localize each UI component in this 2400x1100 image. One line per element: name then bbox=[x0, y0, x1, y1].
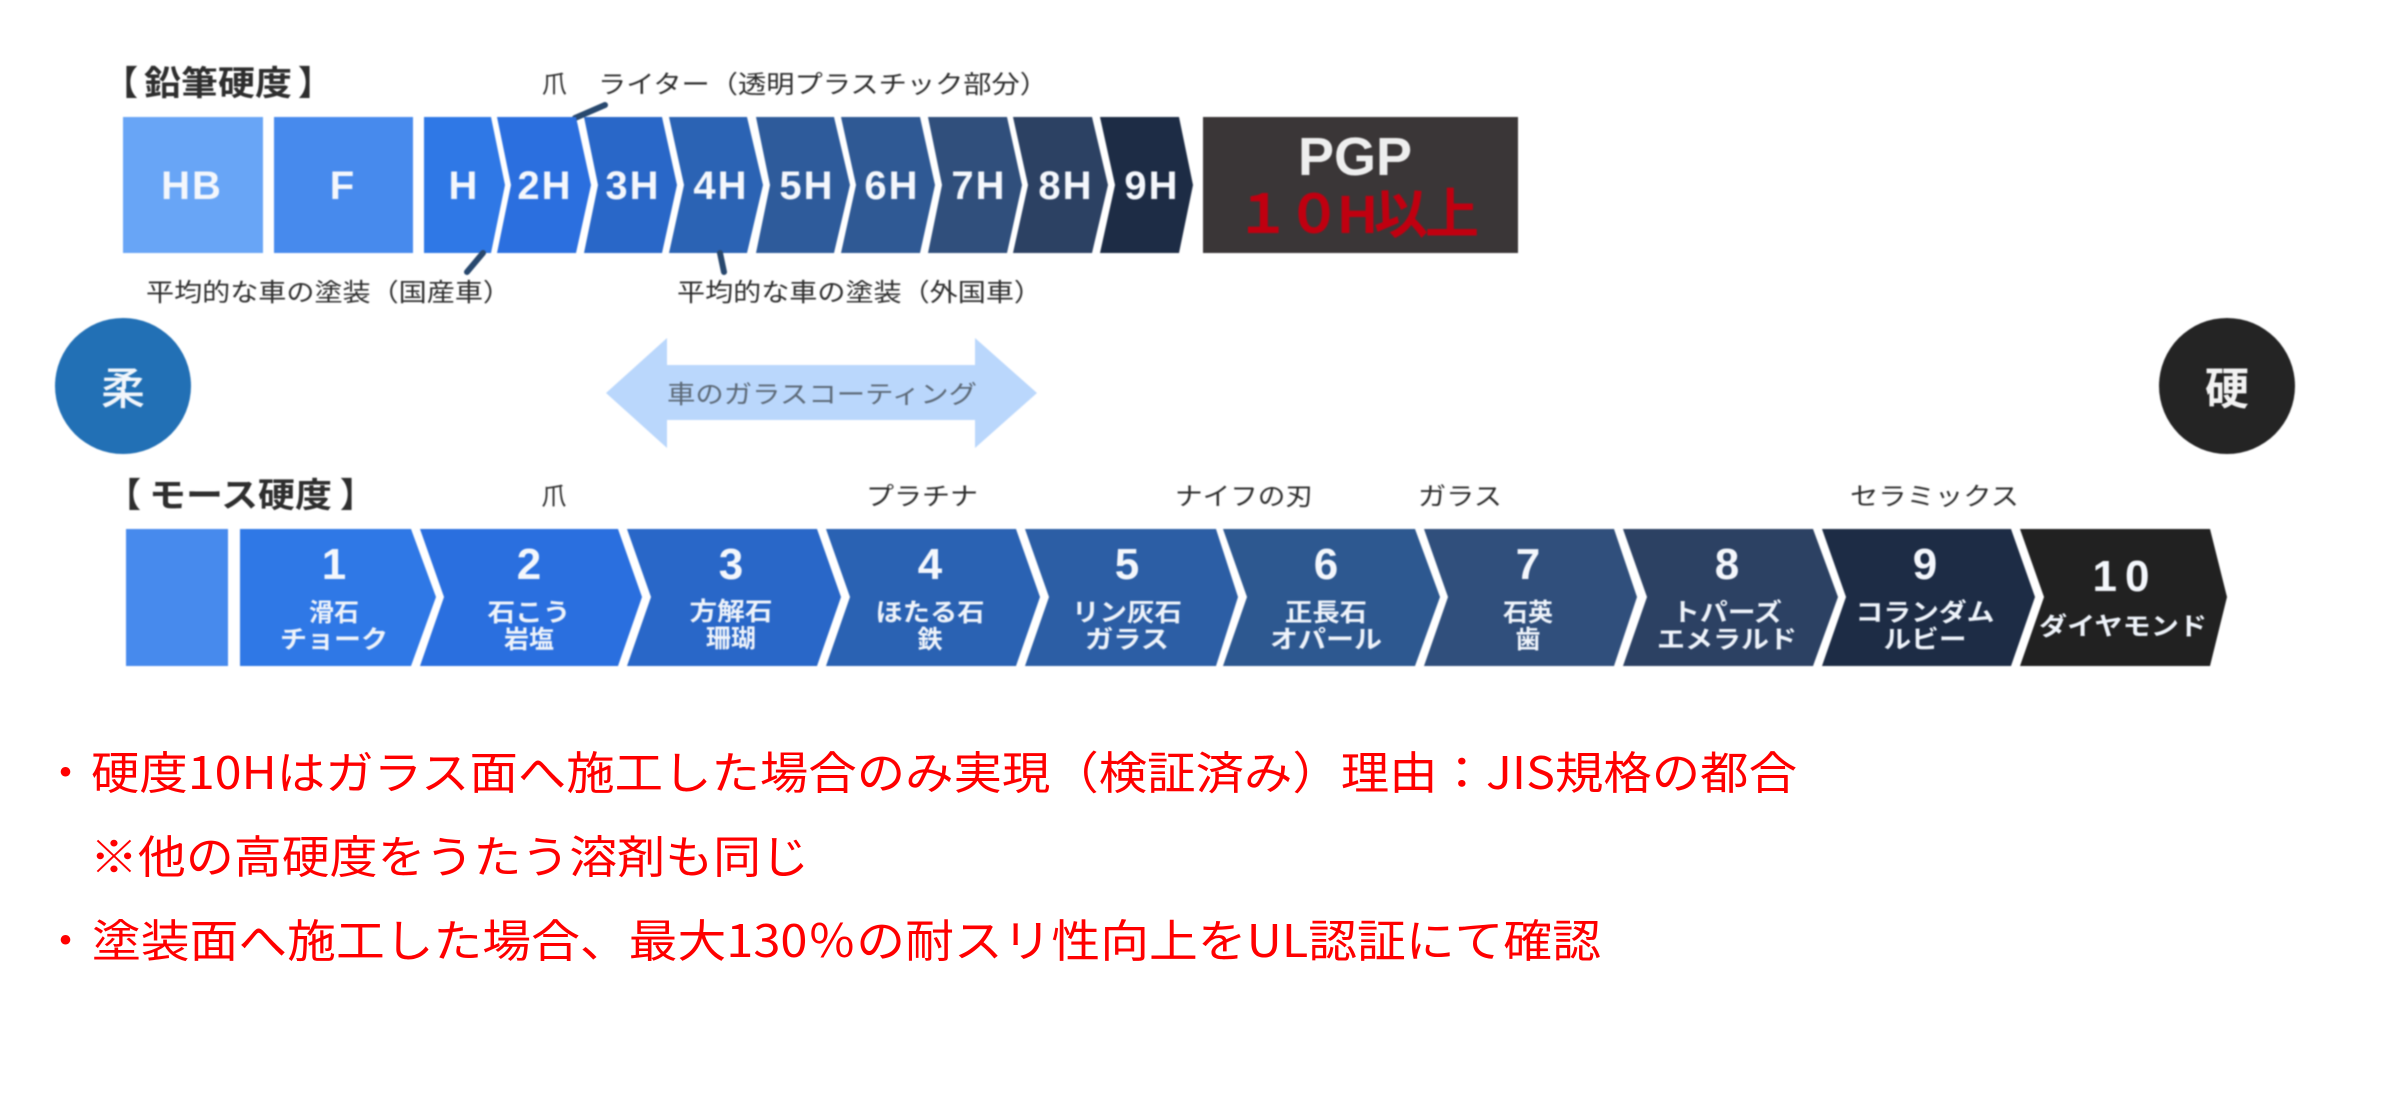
chevron: 4H: 4H bbox=[693, 164, 749, 208]
chevron: mohs 2 bbox=[420, 529, 642, 666]
block: F: F bbox=[330, 164, 356, 208]
block: PGP 10H: PGP bbox=[1298, 127, 1412, 187]
note: line 2: ※他の高硬度をうたう溶剤も同じ bbox=[90, 821, 809, 886]
chevron: 4H bbox=[669, 117, 763, 253]
block: PGP 10H: １０H以上 bbox=[1236, 185, 1479, 245]
arrow: glass coating range bbox=[606, 338, 1037, 448]
label: ceramics: セラミックス bbox=[1850, 477, 2019, 513]
heading: mohs hardness: 】 bbox=[340, 468, 374, 517]
chevron: H bbox=[424, 117, 505, 253]
heading: pencil hardness: 】 bbox=[298, 56, 332, 105]
icon: soft circle: 柔 bbox=[101, 353, 145, 417]
block: blank bbox=[126, 529, 228, 666]
chevron: 2H bbox=[497, 117, 591, 253]
icon: soft circle bbox=[55, 318, 191, 454]
connector: 4H to foreign paint bbox=[720, 253, 724, 272]
chevron: 9H: 9H bbox=[1124, 164, 1180, 208]
chevron: mohs 1: 滑石 bbox=[309, 593, 359, 629]
arrow: glass coating range: 車のガラスコーティング bbox=[667, 375, 977, 411]
chevron: mohs 8: トパーズ bbox=[1672, 593, 1782, 629]
chevron: 6H bbox=[841, 117, 935, 253]
chevron: mohs 9 bbox=[1822, 529, 2035, 666]
chevron: mohs 8 bbox=[1623, 529, 1838, 666]
chevron: mohs 6: 6 bbox=[1314, 540, 1338, 589]
chevron: H: H bbox=[449, 164, 479, 208]
block: F bbox=[274, 117, 413, 253]
label: knife blade: ナイフの刃 bbox=[1175, 477, 1313, 513]
heading: mohs hardness: 【 bbox=[107, 468, 141, 517]
chevron: mohs 8: エメラルド bbox=[1657, 620, 1797, 656]
chevron: mohs 5: 5 bbox=[1115, 540, 1139, 589]
chevron: mohs 7: 7 bbox=[1516, 540, 1540, 589]
label: domestic car paint: 平均的な車の塗装（国産車） bbox=[146, 273, 511, 309]
connector: 2H to lighter bbox=[575, 105, 605, 118]
chevron: mohs 2: 岩塩 bbox=[504, 620, 554, 656]
chevron: mohs 5 bbox=[1025, 529, 1238, 666]
chevron: mohs 7: 歯 bbox=[1515, 620, 1541, 656]
chevron: mohs 10 bbox=[2020, 529, 2227, 666]
note: line 1: ・ bbox=[43, 737, 88, 802]
chevron: mohs 4: 鉄 bbox=[917, 620, 943, 656]
label: foreign car paint: 平均的な車の塗装（外国車） bbox=[677, 273, 1042, 309]
connector: H to domestic paint bbox=[467, 253, 483, 272]
label: platinum: プラチナ bbox=[866, 477, 978, 513]
chevron: 9H bbox=[1100, 117, 1193, 253]
block: HB bbox=[123, 117, 263, 253]
chevron: mohs 6: 正長石 bbox=[1285, 593, 1367, 629]
chevron: mohs 4: ほたる石 bbox=[876, 593, 984, 629]
icon: hard circle: 硬 bbox=[2205, 353, 2249, 417]
chevron: mohs 3: 珊瑚 bbox=[706, 619, 756, 655]
chevron: mohs 6: オパール bbox=[1270, 620, 1382, 656]
chevron: mohs 10: 10 bbox=[2093, 552, 2157, 601]
heading: pencil hardness: 【 bbox=[104, 56, 138, 105]
chevron: mohs 3: 3 bbox=[719, 540, 743, 589]
block: HB: HB bbox=[161, 164, 223, 208]
chevron: mohs 7 bbox=[1424, 529, 1637, 666]
chevron: 5H: 5H bbox=[779, 164, 835, 208]
chevron: mohs 4: 4 bbox=[918, 540, 943, 589]
chevron: 8H: 8H bbox=[1038, 164, 1094, 208]
chevron: mohs 2: 2 bbox=[517, 540, 541, 589]
chevron: 8H bbox=[1013, 117, 1108, 253]
note: line 3: 塗装面へ施工した場合、最大130％の耐スリ性向上をUL認証にて確認 bbox=[92, 905, 1601, 970]
chevron: mohs 3 bbox=[627, 529, 841, 666]
chevron: 7H bbox=[928, 117, 1022, 253]
chevron: mohs 1 bbox=[240, 529, 436, 666]
panel: pencil hardness bbox=[104, 56, 1518, 309]
chevron: mohs 8: 8 bbox=[1715, 540, 1739, 589]
note: line 1: 硬度10Hはガラス面へ施工した場合のみ実現（検証済み）理由：JIS規格の都合 bbox=[91, 737, 1797, 802]
chevron: mohs 9: ルビー bbox=[1884, 620, 1966, 656]
label: nail and lighter: ライター（透明プラスチック部分） bbox=[598, 65, 1048, 101]
chevron: mohs 4 bbox=[826, 529, 1040, 666]
chevron: 3H bbox=[584, 117, 677, 253]
panel: mohs hardness bbox=[107, 468, 2227, 666]
block: PGP 10H bbox=[1203, 117, 1518, 253]
chevron: 2H: 2H bbox=[517, 164, 573, 208]
chevron: mohs 1: 1 bbox=[322, 540, 346, 589]
chevron: mohs 1: チョーク bbox=[280, 620, 388, 656]
chevron: 3H: 3H bbox=[605, 164, 661, 208]
note: line 3: ・ bbox=[43, 905, 88, 970]
heading: pencil hardness: 鉛筆硬度 bbox=[144, 56, 292, 105]
text block: red notes bbox=[43, 737, 1797, 970]
chevron: mohs 6 bbox=[1223, 529, 1440, 666]
chevron: mohs 9: コランダム bbox=[1856, 593, 1994, 629]
chevron: mohs 10: ダイヤモンド bbox=[2039, 607, 2207, 643]
icon: hard circle bbox=[2159, 318, 2295, 454]
chevron: mohs 5: ガラス bbox=[1085, 620, 1169, 656]
chevron: mohs 2: 石こう bbox=[488, 593, 570, 629]
heading: mohs hardness: モース硬度 bbox=[149, 468, 332, 517]
chevron: mohs 7: 石英 bbox=[1503, 593, 1553, 629]
chevron: mohs 3: 方解石 bbox=[690, 592, 772, 628]
chevron: 5H bbox=[756, 117, 850, 253]
chevron: 7H: 7H bbox=[951, 164, 1007, 208]
chevron: mohs 9: 9 bbox=[1913, 540, 1937, 589]
chevron: 6H: 6H bbox=[864, 164, 920, 208]
label: nail: 爪 bbox=[541, 477, 567, 513]
label: glass: ガラス bbox=[1418, 477, 1502, 513]
label: nail and lighter: 爪 bbox=[542, 65, 567, 101]
chevron: mohs 5: リン灰石 bbox=[1072, 593, 1182, 629]
